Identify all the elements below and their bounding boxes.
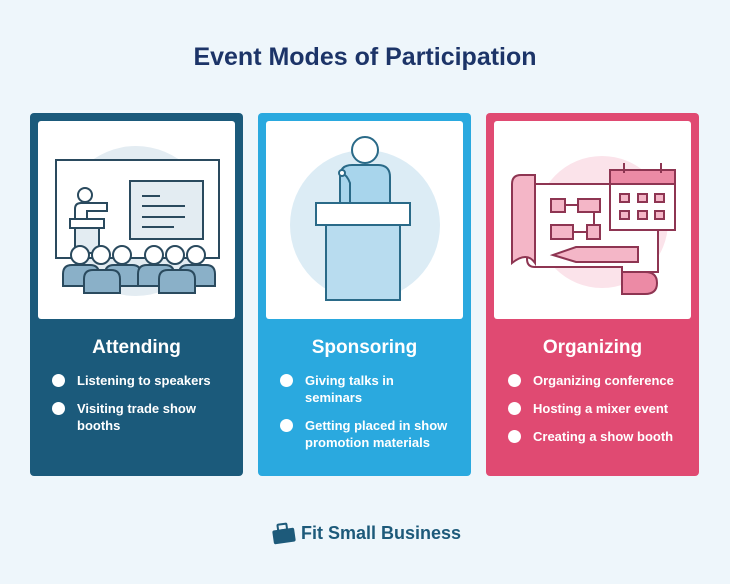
icon: presentation audience (38, 121, 235, 319)
panel: attending (30, 113, 243, 476)
list (280, 373, 448, 450)
icon: blueprint calendar (494, 121, 691, 319)
panel: sponsoring (258, 113, 471, 476)
list: Hosting a mixer event (533, 401, 668, 416)
list: Creating a show booth (533, 429, 673, 444)
list: Visiting trade show booths (77, 401, 196, 433)
panel: organizing (486, 113, 699, 476)
icon: podium speaker (266, 121, 463, 319)
heading: Sponsoring (312, 337, 417, 358)
logo: Fit Small Business (301, 523, 461, 543)
list: Listening to speakers (77, 373, 211, 388)
list (52, 373, 211, 433)
list: Getting placed in show promotion materials (305, 418, 447, 450)
heading: Attending (92, 337, 181, 358)
heading: Organizing (543, 337, 642, 358)
list: Organizing conference (533, 373, 674, 388)
title: Event Modes of Participation (193, 43, 537, 71)
list: Giving talks in seminars (305, 373, 394, 405)
list (508, 373, 674, 444)
